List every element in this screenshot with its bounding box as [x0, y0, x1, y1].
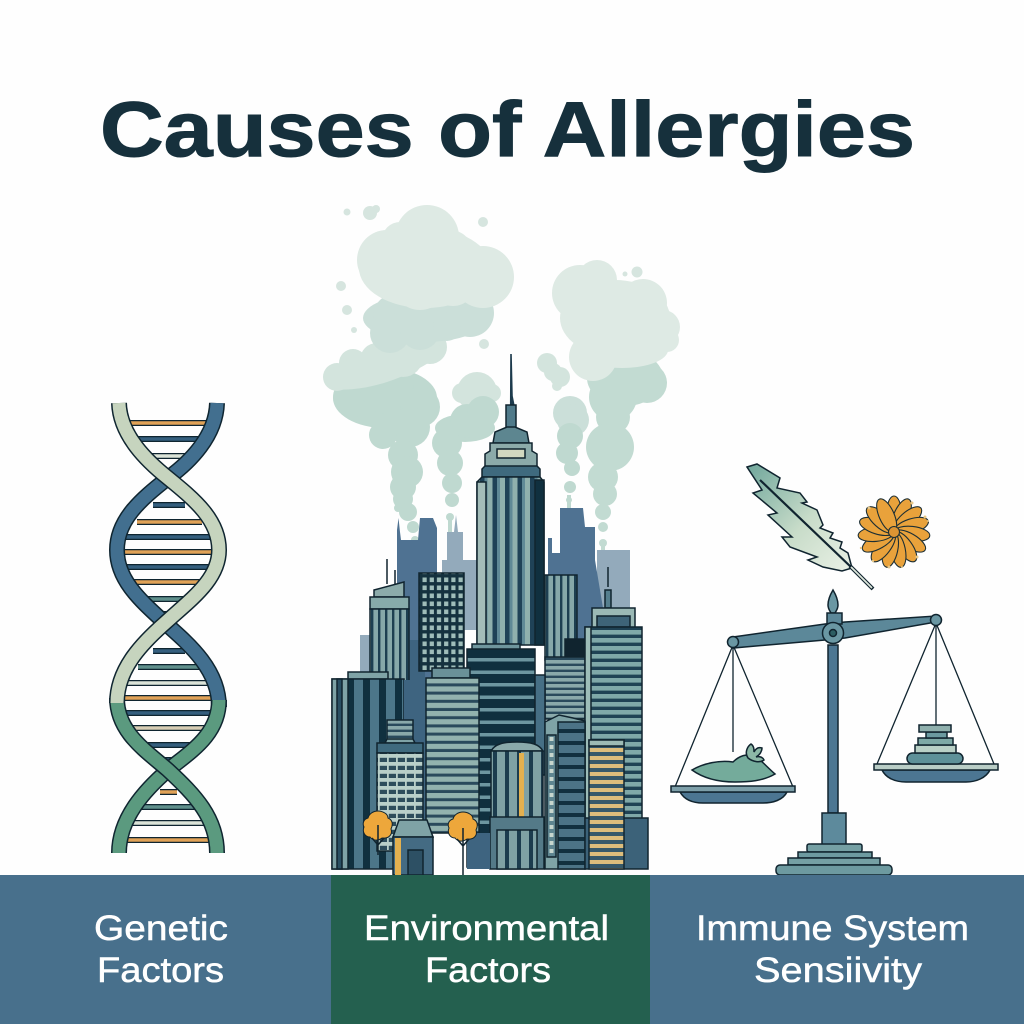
- smoke: right plume: [552, 260, 680, 567]
- title: Causes of Allergies: [100, 85, 915, 173]
- smoke: left plume: [323, 205, 514, 568]
- house with door: [393, 820, 433, 875]
- skyscraper: left stepped: [370, 559, 409, 684]
- skyscraper: main tower: [477, 354, 544, 645]
- smoke: floating particles: [336, 205, 642, 349]
- skyscraper: narrow with dark bands: [545, 715, 585, 869]
- footer band: immune system sensitivity: Immune System: [696, 909, 969, 948]
- footer band: environmental factors: Environmental: [364, 909, 609, 948]
- footer band: immune system sensitivity: Sensiivity: [754, 951, 923, 990]
- footer band: genetic factors: [0, 875, 331, 1024]
- illustration: balance scale: [671, 590, 998, 875]
- illustration: city skyline: [332, 354, 648, 875]
- icon: feather: [747, 464, 873, 589]
- scale strings: [675, 623, 994, 787]
- footer band: environmental factors: Factors: [425, 951, 551, 990]
- scale left pan: [671, 786, 795, 803]
- illustration: DNA double helix: [117, 403, 219, 853]
- DNA strand: green lower: [117, 698, 219, 853]
- DNA strand: pale: [117, 403, 219, 703]
- skyline: background silhouettes: [360, 508, 630, 740]
- skyscraper: centre-left horizontal: [426, 668, 479, 833]
- skyscraper: far left: [332, 672, 426, 870]
- footer band: immune system sensitivity: [650, 875, 1024, 1024]
- scale right pan: [874, 764, 998, 782]
- scale beam and hub: [728, 590, 942, 648]
- skyscraper: tower base dark: [467, 644, 545, 867]
- flower petals: [857, 496, 931, 569]
- DNA rungs: [122, 423, 215, 840]
- scale weights: [907, 725, 963, 764]
- footer band: genetic factors: Genetic: [94, 909, 228, 948]
- skyscraper: window grid: [419, 573, 464, 671]
- skyscraper: lower right: [585, 740, 648, 869]
- skyscraper: right thin: [545, 575, 577, 660]
- smoke: small centre-right plume: [537, 353, 589, 511]
- skyscraper: small left with grid: [377, 720, 423, 851]
- skyscraper: right horizontal: [545, 639, 587, 719]
- DNA strand: blue: [117, 403, 219, 707]
- smoke: middle plume: [432, 372, 501, 541]
- skyscraper: right tall: [585, 567, 642, 819]
- tree: right: [448, 812, 477, 875]
- illustration: smoke plumes: [323, 205, 680, 568]
- tree: left: [363, 811, 392, 855]
- skyscraper: centre vertical with yellow: [467, 742, 544, 869]
- icon: flower with pollen: [857, 496, 931, 569]
- pollen dots: [860, 502, 929, 568]
- scale column and base: [776, 645, 892, 875]
- footer band: environmental factors: [331, 875, 650, 1024]
- scale pouch: [692, 744, 775, 782]
- footer band: genetic factors: Factors: [97, 951, 224, 990]
